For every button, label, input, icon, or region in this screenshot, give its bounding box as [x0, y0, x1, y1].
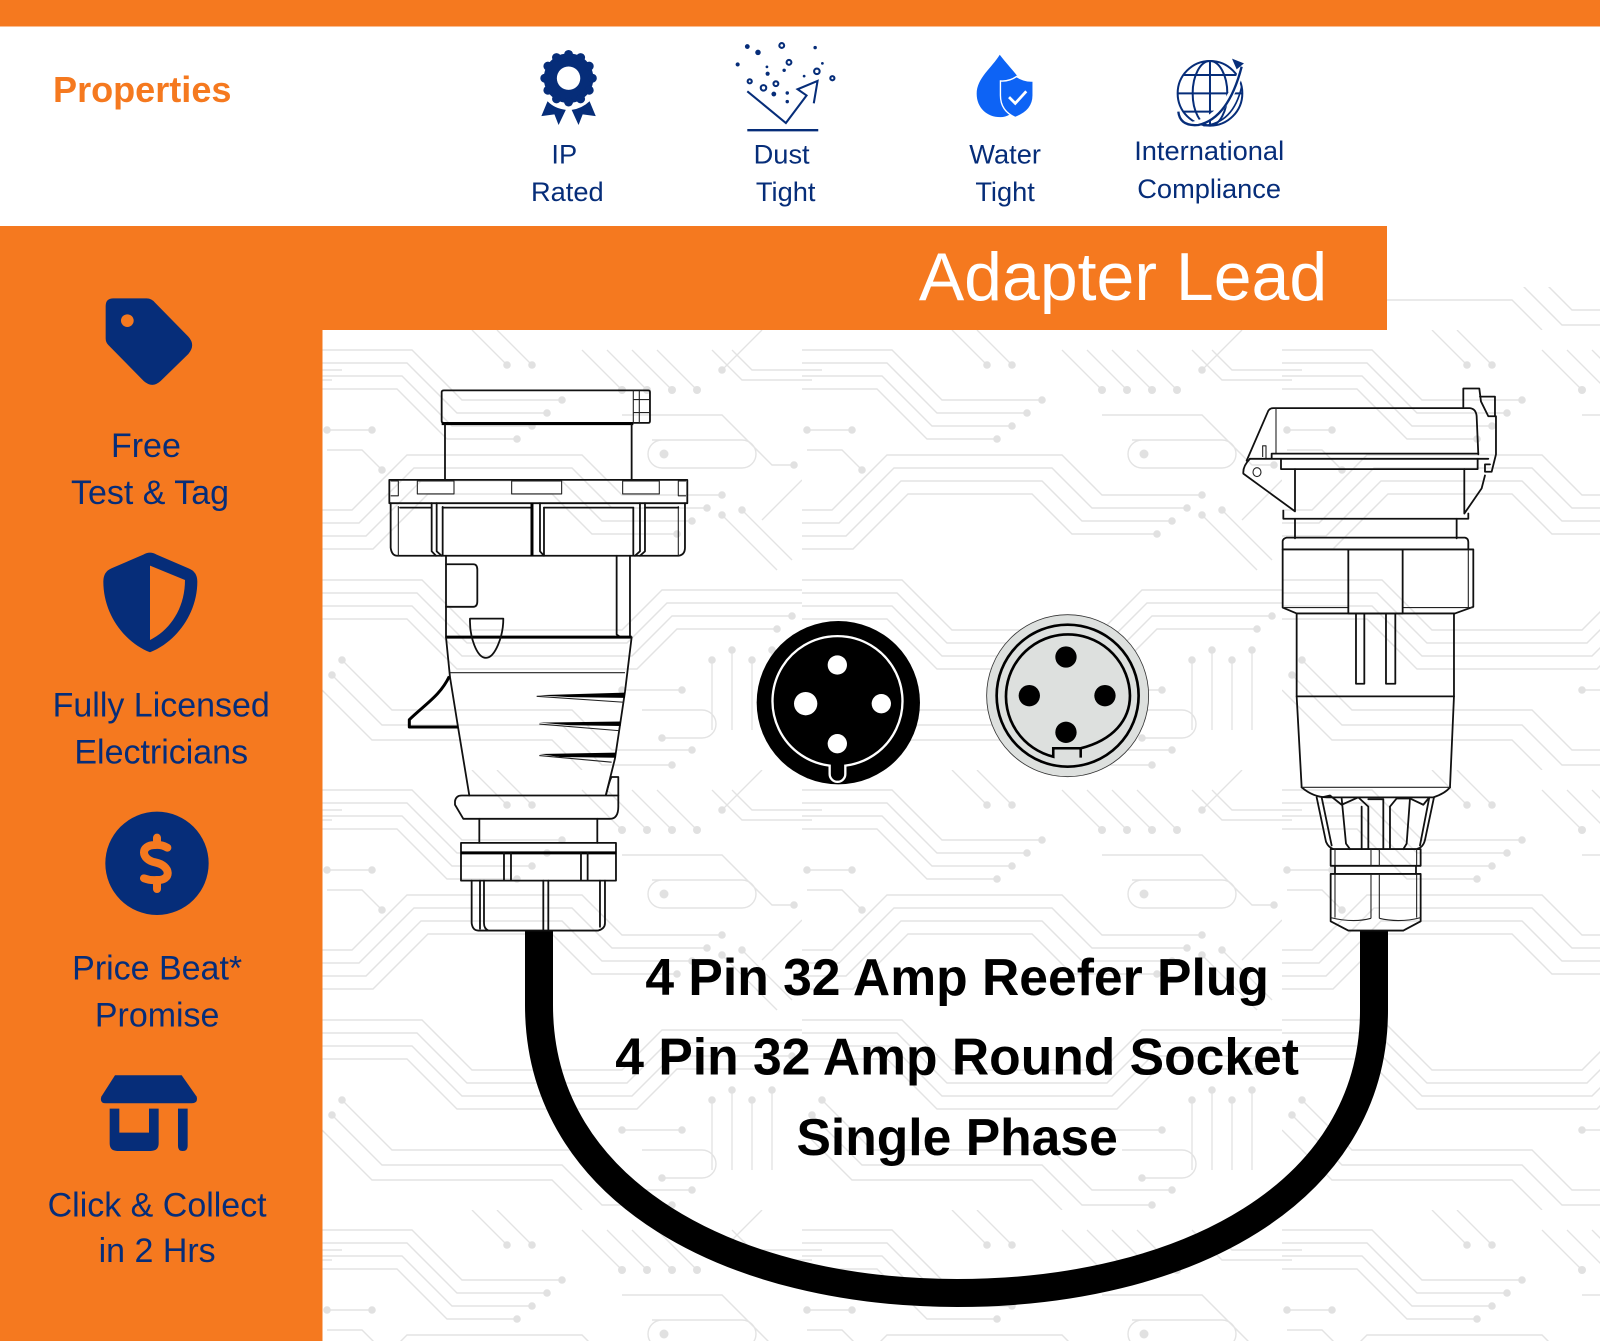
label: IP Rated: Rated: [531, 176, 604, 207]
circuit board background pattern: [322, 287, 1600, 1341]
title: Adapter Lead: Adapter Lead: [919, 239, 1327, 315]
label: International Compliance: International: [1134, 135, 1284, 166]
sidebar label: Click & Collect in 2 Hrs: in 2 Hrs: [99, 1232, 216, 1270]
cable: [539, 930, 1374, 1293]
label: IP Rated: IP: [551, 138, 577, 169]
plug pin face diagram: [757, 621, 920, 784]
round socket drawing: [1243, 388, 1496, 931]
icon: dust tight: [736, 43, 834, 130]
sidebar label: Fully Licensed Electricians: [53, 686, 270, 771]
label: International Compliance: Compliance: [1137, 173, 1281, 204]
product description text: [615, 948, 1299, 1166]
label: Dust Tight: [754, 138, 816, 207]
sidebar label: Free Test & Tag: [71, 427, 229, 512]
label: Water Tight: Water: [969, 138, 1041, 169]
sidebar label: Click & Collect in 2 Hrs: [48, 1186, 267, 1270]
product description text: Single Phase: [796, 1108, 1118, 1166]
icon: globe with orbit arrow: [1178, 59, 1244, 126]
sidebar label: Fully Licensed Electricians: Fully Licensed: [53, 686, 270, 724]
socket pin face diagram: [987, 615, 1149, 777]
label: Dust Tight: Dust: [754, 138, 810, 169]
sidebar label: Free Test & Tag: Free: [111, 427, 181, 465]
reefer plug drawing: [389, 390, 687, 931]
label: International Compliance: [1134, 135, 1284, 204]
product description text: 4 Pin 32 Amp Reefer Plug: [645, 948, 1269, 1006]
label: IP Rated: [531, 138, 604, 207]
icon: IP rated award: [540, 50, 597, 125]
sidebar label: Price Beat Promise: [72, 950, 242, 1035]
title band: [0, 226, 1387, 330]
label: Water Tight: [969, 138, 1041, 207]
sidebar icon: shield: [103, 553, 197, 652]
sidebar label: Fully Licensed Electricians: Electricians: [74, 733, 248, 771]
sidebar icon: shop: [101, 1075, 197, 1151]
sidebar label: Click & Collect in 2 Hrs: Click & Collect: [48, 1186, 267, 1224]
icon: water drop with shield: [977, 55, 1033, 117]
label: Dust Tight: Tight: [756, 176, 816, 207]
product description text: 4 Pin 32 Amp Round Socket: [615, 1027, 1299, 1085]
sidebar icon: dollar coin: [105, 812, 209, 915]
left orange sidebar: [0, 226, 322, 1341]
sidebar label: Price Beat Promise: Price Beat*: [72, 950, 242, 988]
heading: Properties: Properties: [53, 69, 231, 110]
sidebar label: Price Beat Promise: Promise: [95, 997, 219, 1035]
top orange bar: [0, 0, 1600, 26]
sidebar icon: price tag: [106, 298, 192, 385]
label: Water Tight: Tight: [975, 176, 1035, 207]
sidebar label: Free Test & Tag: Test & Tag: [71, 474, 229, 512]
